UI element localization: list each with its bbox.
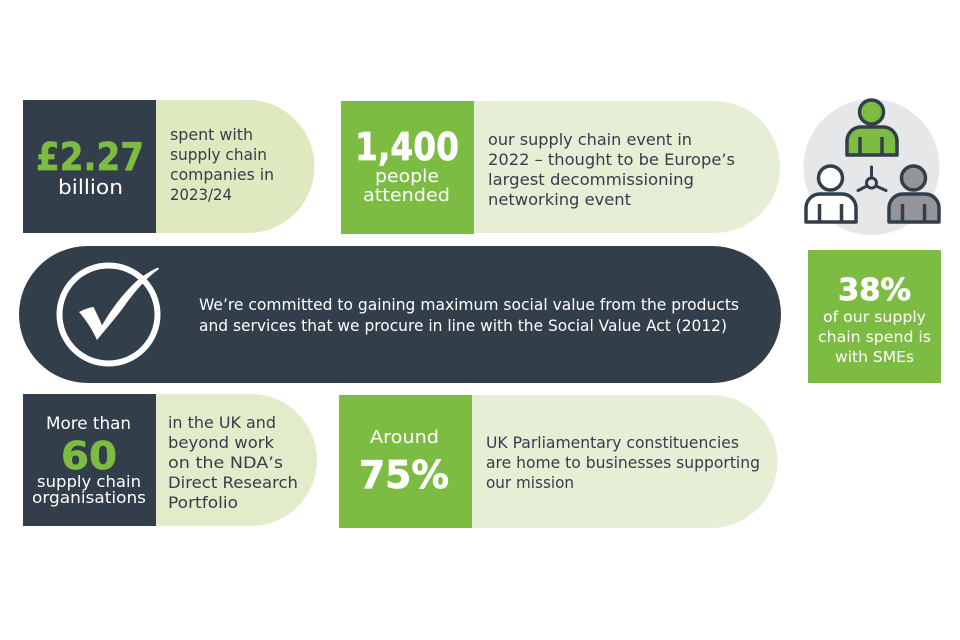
description: parliamentary constituencies: our mission [486,473,574,492]
description: direct research portfolio [168,413,298,512]
description: supply chain event: our supply chain event in [488,130,692,149]
description: direct research portfolio: Portfolio [168,493,238,512]
icon: green person [847,100,897,155]
description: spent with supply chain: supply chain [170,145,267,164]
panel: social value commitment [19,246,781,383]
panel: 2.27 billion spend [23,100,314,233]
description: parliamentary constituencies: UK Parliamentary constituencies [486,433,739,452]
description: direct research portfolio: Direct Research [168,473,298,492]
description: direct research portfolio: on the NDA’s [168,453,283,472]
stat label: supply chain organisations [32,472,146,507]
icon: grey person [889,166,939,222]
icon: three connected people [804,99,940,235]
stat label: supply chain organisations: supply chain [37,472,141,491]
icon: connector [858,167,886,190]
description: spent with supply chain: 2023/24 [170,185,232,204]
stat label: supply chain organisations: organisations [32,488,146,507]
stat label: people attended: people [375,166,439,187]
icon: white person [806,166,856,222]
description: supply chain event: 2022 – thought to be Europe’s [488,150,735,169]
stat label: of our supply chain spend [818,308,931,366]
description: spent with supply chain: companies in [170,165,274,184]
stat label: people attended: attended [363,185,450,206]
stat label: of our supply chain spend: chain spend is [818,328,931,346]
panel: 1,400 people attended [341,101,780,234]
panel: 38% SMEs [808,250,941,383]
description: spent with supply chain: spent with [170,125,253,144]
stat: 1,400: 1,400 [355,125,459,169]
description: supply chain event: largest decommissioning [488,170,694,189]
stat: 75%: 75% [359,453,449,497]
description: direct research portfolio: beyond work [168,433,275,452]
stat label: more than: More than [46,414,131,433]
stat: £2.27: £2.27 [36,135,144,179]
stat label: of our supply chain spend: with SMEs [835,348,914,366]
stat label: billion: billion [58,175,123,199]
stat: 38%: 38% [838,273,911,308]
description: direct research portfolio: in the UK and [168,413,276,432]
panel: around 75% [339,395,778,528]
text: commitment statement: We’re committed to gaining maximum social value from the products [199,295,739,314]
text: commitment statement: and services that we procure in line with the Social Value Act (2012) [199,316,727,335]
description: supply chain event: networking event [488,190,631,209]
stat label: of our supply chain spend: of our supply [823,308,926,326]
panel: more than 60 organisations [23,394,317,526]
text: commitment statement [199,295,739,335]
description: spent with supply chain [170,125,274,204]
stat label: around: Around [370,427,439,448]
description: supply chain event [488,130,735,209]
description: parliamentary constituencies [486,433,760,492]
stat label: people attended [363,166,450,206]
description: parliamentary constituencies: are home to businesses supporting [486,453,760,472]
icon: check mark in circle [60,266,159,364]
stat: 60: 60 [61,434,117,478]
